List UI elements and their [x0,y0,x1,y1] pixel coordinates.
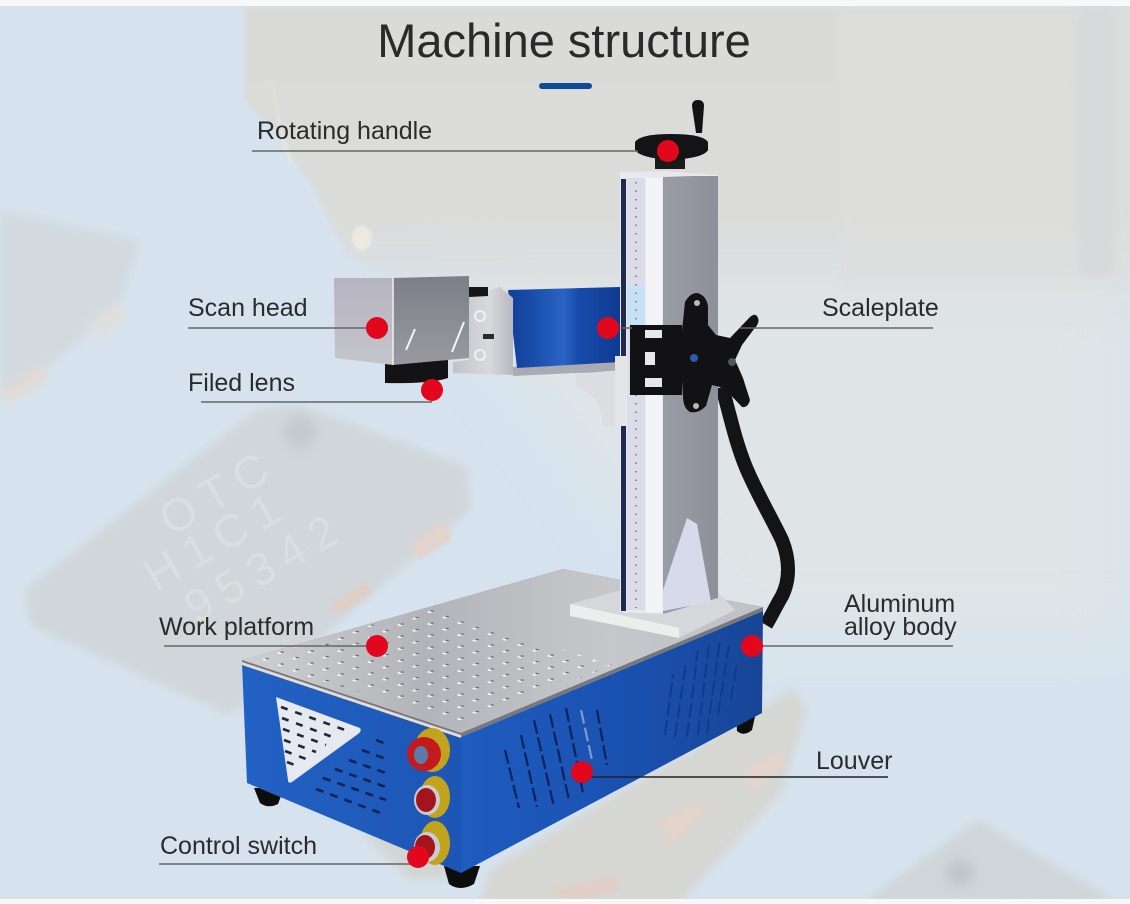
callout: Rotating handle: Rotating handle [257,117,432,145]
title: Machine structure [377,14,751,67]
callout: Work platform: Work platform [159,613,314,641]
callout: Control switch: Control switch [160,832,317,860]
base left face [242,663,461,873]
callout: Scaleplate: Scaleplate [822,294,939,322]
callout: Aluminum alloy body: Aluminum [844,590,955,618]
title accent bar [539,83,592,89]
monitor bracket [630,293,758,412]
control buttons [407,728,450,865]
callout: Louver [571,747,892,783]
callout: Aluminum alloy body [741,590,957,657]
callout: Work platform [159,613,388,657]
callout: Scan head [188,294,388,339]
callout: Rotating handle [252,117,679,162]
arm bracket [453,287,513,375]
brace [663,518,711,611]
cable [722,387,788,625]
column foot plate [570,590,735,638]
scan head [334,276,469,383]
faint chip lettering [135,437,355,633]
left vents [316,740,386,815]
callout: Control switch [159,832,429,868]
callout: Scan head: Scan head [188,294,308,322]
right vents [665,640,737,737]
callout: Filed lens: Filed lens [188,369,295,397]
arm support [575,370,620,426]
callout: Aluminum alloy body: alloy body [844,613,957,641]
callout: Filed lens [188,369,443,402]
laser marking machine [242,100,788,888]
feet [254,712,756,888]
work platform [242,569,763,738]
perforated triangle plate [276,697,361,783]
column [620,171,718,614]
callout: Scaleplate [597,294,939,339]
base right face [461,611,763,873]
faint chip lettering: OTC [150,437,286,545]
faint chip lettering: H1C1 [135,477,297,601]
callout: Louver: Louver [816,747,892,775]
rotating handle [635,100,708,169]
laser arm [508,287,620,376]
front vents [505,708,607,808]
faint chip lettering: 95342 [175,499,355,633]
